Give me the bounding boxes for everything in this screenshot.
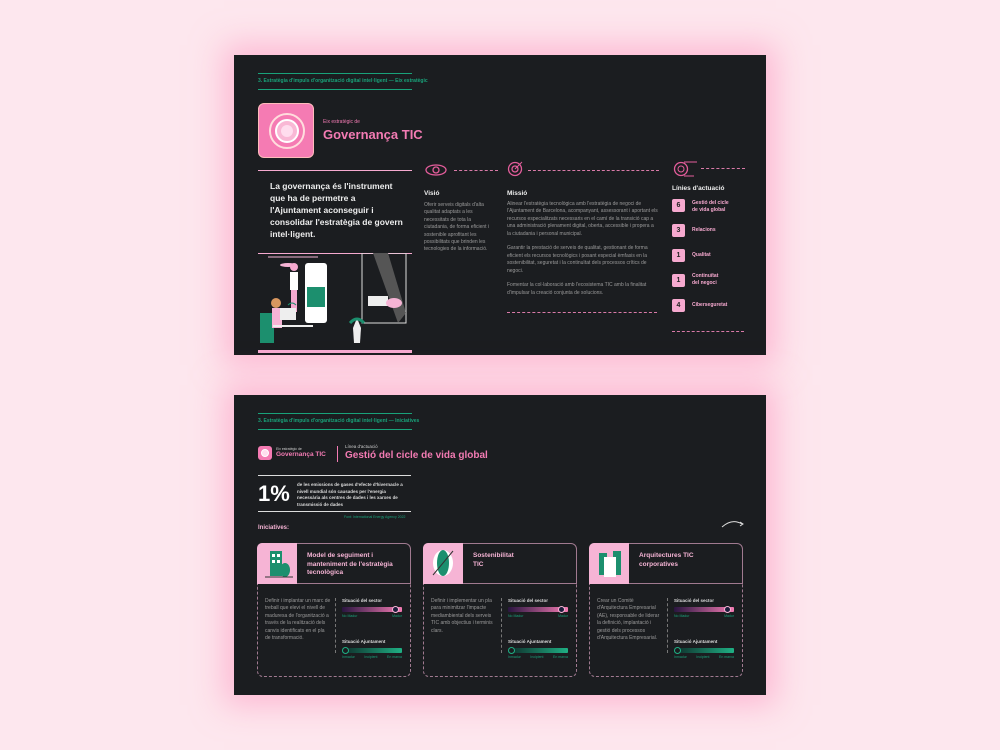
card: sostenibilitat TIC: Inmadur xyxy=(508,655,521,659)
header breadcrumb xyxy=(258,413,412,430)
section: missio: Missió xyxy=(507,190,527,197)
card: arquitectures TIC: corporatives xyxy=(639,560,678,568)
icon: small governance xyxy=(258,446,272,460)
card: sostenibilitat TIC: Definir i implementar un pla para minimitzar l'impacte mediambiental dels serveis TIC amb objectius i terminis clars. xyxy=(431,598,493,634)
section: visio xyxy=(424,164,498,252)
section: linies d'actuacio: 1 xyxy=(677,277,680,284)
heading: gestio del cicle: Gestió del cicle de vida global xyxy=(345,450,488,461)
card: arquitectures TIC: Crear un Comitè d'Arquitectura Empresarial (AE), responsable de liderar la definició, implantació i gestió dels processos d'Arquitectura Empresarial. xyxy=(597,598,659,641)
card: model de seguiment: Incipient xyxy=(364,655,377,659)
section: linies d'actuacio: Gestió del cicle xyxy=(692,200,729,206)
card: arquitectures TIC: En marxa xyxy=(719,655,734,659)
card: model de seguiment: Situació Ajuntament xyxy=(342,639,385,644)
header breadcrumb: 3. Estratègia d'impuls d'organització digital intel·ligent — Iniciatives xyxy=(258,418,419,424)
card: sostenibilitat TIC: Madur xyxy=(558,614,568,618)
section: linies d'actuacio: 3 xyxy=(677,227,680,234)
section: linies d'actuacio: Relacions xyxy=(692,227,716,233)
card: arquitectures TIC: Arquitectures TIC xyxy=(639,552,694,559)
section: linies d'actuacio: 6 xyxy=(677,202,680,209)
card: sostenibilitat TIC: TIC xyxy=(473,560,483,568)
section: linies d'actuacio: Ciberseguretat xyxy=(692,302,727,308)
card: model de seguiment: En marxa xyxy=(387,655,402,659)
stat: 1% xyxy=(258,475,411,512)
section: linies d'actuacio: de vida global xyxy=(692,207,725,213)
icon: arrow xyxy=(722,521,744,528)
header breadcrumb xyxy=(258,73,412,90)
icon: governance target xyxy=(258,103,314,158)
section: missio: Alinear l'estratègia tecnològica amb l'estratègia de negoci de l'Ajuntament de Barcelona, acompanyant, assessorant i aportant els recursos especialitzats necessaris en el camí de la transició cap a una administració plenament digital, oberta, accessible i propera a la ciutadania i personal municipal. xyxy=(507,201,658,237)
heading: gestio del cicle: Línea d'actuació xyxy=(345,444,378,449)
card: model de seguiment: Madur xyxy=(392,614,402,618)
section: linies d'actuacio: 4 xyxy=(677,302,680,309)
panel: iniciatives xyxy=(234,395,766,695)
heading small: governanca: Governança TIC xyxy=(276,451,326,458)
title xyxy=(323,119,423,142)
icon: gear arrows xyxy=(674,162,697,176)
card: sostenibilitat TIC: Situació del sector xyxy=(508,598,548,603)
panel: eix estrategic xyxy=(234,55,766,355)
icon: eye xyxy=(425,164,447,176)
illustration: office xyxy=(258,253,412,353)
stat: 1%: de les emissions de gases d'efecte d'hivernacle a nivell mundial són causades per l'energia necessària als centres de dades i les xarxes de transmissió de dades xyxy=(297,482,403,506)
section: missio xyxy=(507,162,659,313)
section: visio: Oferir serveis digitals d'alta qualitat adaptats a les necessitats de tota la ciutadania, de forma eficient i sostenible aprofitant les possibilitats que brinden les tecnologies de la informació. xyxy=(424,202,489,252)
heading: gestio del cicle xyxy=(345,444,488,461)
card: sostenibilitat TIC: No Madur xyxy=(508,614,523,618)
section: linies d'actuacio xyxy=(672,162,745,332)
card: sostenibilitat TIC: Incipient xyxy=(530,655,543,659)
section: visio: Visió xyxy=(424,190,439,197)
card: model de seguiment: Inmadur xyxy=(342,655,355,659)
card: arquitectures TIC: Inmadur xyxy=(674,655,687,659)
section: missio: Fomentar la col·laboració amb l'ecosistema TIC amb la finalitat d'impulsar la creació conjunta de solucions. xyxy=(507,282,646,296)
card: arquitectures TIC: Incipient xyxy=(696,655,709,659)
section: missio: Garantir la prestació de serveis de qualitat, gestionant de forma eficient els recursos tecnològics i posant especial èmfasis en la sostenibilitat, seguretat i la continuïtat dels processos crítics de negoci. xyxy=(507,245,648,274)
section: linies d'actuacio: Línies d'actuació xyxy=(672,185,724,192)
section: linies d'actuacio: del negoci xyxy=(692,280,717,286)
card: model de seguiment: No Madur xyxy=(342,614,357,618)
stat: 1%: 1% xyxy=(258,481,290,506)
section: linies d'actuacio: 1 xyxy=(677,252,680,259)
card: sostenibilitat TIC: En marxa xyxy=(553,655,568,659)
section: linies d'actuacio: Continuïtat xyxy=(692,273,718,279)
card: arquitectures TIC: No Madur xyxy=(674,614,689,618)
card: model de seguiment xyxy=(257,543,411,677)
label: iniciatives: Iniciatives: xyxy=(258,525,289,531)
panel: iniciatives: Font: International Energy Agency 2022 xyxy=(344,515,406,519)
card: arquitectures TIC: Situació Ajuntament xyxy=(674,639,717,644)
card: sostenibilitat TIC xyxy=(423,543,577,677)
header breadcrumb: 3. Estratègia d'impuls d'organització digital intel·ligent — Eix estratègic xyxy=(258,78,428,84)
card: arquitectures TIC xyxy=(589,543,743,677)
section: linies d'actuacio: Qualitat xyxy=(692,252,711,258)
icon: target xyxy=(508,162,522,176)
card: model de seguiment: Model de seguiment i xyxy=(307,552,373,559)
heading small: governanca xyxy=(276,447,326,458)
card: sostenibilitat TIC: Situació Ajuntament xyxy=(508,639,551,644)
card: sostenibilitat TIC: Sostenibilitat xyxy=(473,552,514,559)
title: Eix estratègic de xyxy=(323,119,360,125)
title: Governança TIC xyxy=(323,127,423,142)
card: model de seguiment: manteniment de l'estratègia xyxy=(307,560,393,568)
heading small: governanca: Eix estratègic de xyxy=(276,447,302,451)
card: arquitectures TIC: Madur xyxy=(724,614,734,618)
card: arquitectures TIC: Situació del sector xyxy=(674,598,714,603)
card: model de seguiment: Definir i implantar un marc de treball que elevi el nivell de maduresa de l'organització a través de la realització dels canvis identificats en el pla de transformació. xyxy=(265,598,330,641)
card: model de seguiment: Situació del sector xyxy=(342,598,382,603)
statement text: La governança és l'instrument que ha de permetre a l'Ajuntament aconseguir i consolidar l'estratègia de govern intel·ligent. xyxy=(270,181,403,239)
card: model de seguiment: tecnològica xyxy=(307,569,343,576)
